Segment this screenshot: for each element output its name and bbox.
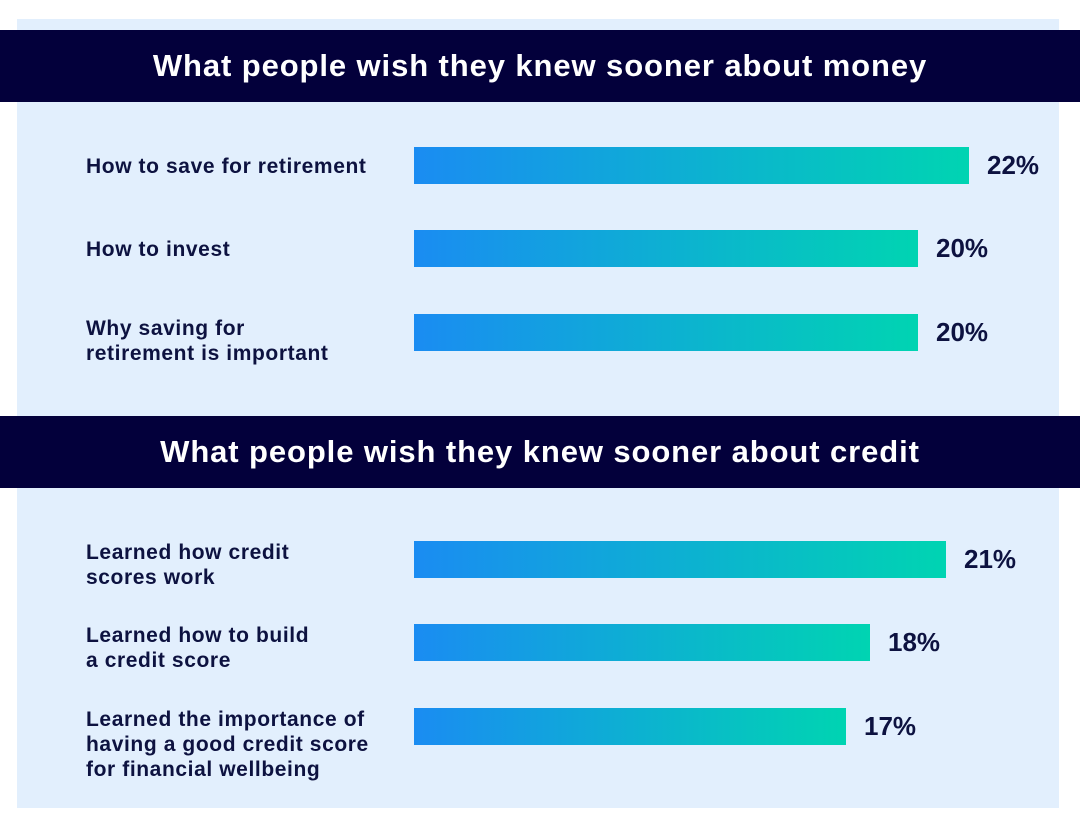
- row: save for retirement: [86, 147, 1039, 184]
- label: having a good credit score: [86, 733, 369, 756]
- bar: [414, 147, 969, 184]
- value: 20%: [936, 317, 988, 347]
- label: [86, 624, 309, 672]
- label: How to invest: [86, 238, 230, 261]
- row: importance: [86, 708, 916, 781]
- label: [86, 317, 329, 365]
- label: Learned the importance of: [86, 708, 365, 731]
- value: 18%: [888, 627, 940, 657]
- label: Learned how credit: [86, 541, 289, 564]
- row: why saving: [86, 314, 988, 365]
- label: [86, 541, 289, 589]
- label: How to save for retirement: [86, 155, 366, 178]
- label: retirement is important: [86, 342, 329, 365]
- bar: [414, 624, 870, 661]
- bar: [414, 708, 846, 745]
- heading: credit: What people wish they knew sooner about credit: [160, 434, 920, 469]
- heading: credit: [0, 416, 1080, 488]
- bar: [414, 541, 946, 578]
- value: 20%: [936, 233, 988, 263]
- bar: [414, 314, 918, 351]
- row: credit scores work: [86, 541, 1016, 589]
- bar: [414, 230, 918, 267]
- row: build credit: [86, 624, 940, 672]
- label: Why saving for: [86, 317, 245, 340]
- heading: money: [0, 30, 1080, 102]
- label: for financial wellbeing: [86, 758, 320, 781]
- value: 21%: [964, 544, 1016, 574]
- row: invest: [86, 230, 988, 267]
- label: scores work: [86, 566, 215, 589]
- value: 22%: [987, 150, 1039, 180]
- label: a credit score: [86, 649, 231, 672]
- label: Learned how to build: [86, 624, 309, 647]
- heading: money: What people wish they knew sooner about money: [153, 48, 927, 83]
- value: 17%: [864, 711, 916, 741]
- label: [86, 708, 369, 781]
